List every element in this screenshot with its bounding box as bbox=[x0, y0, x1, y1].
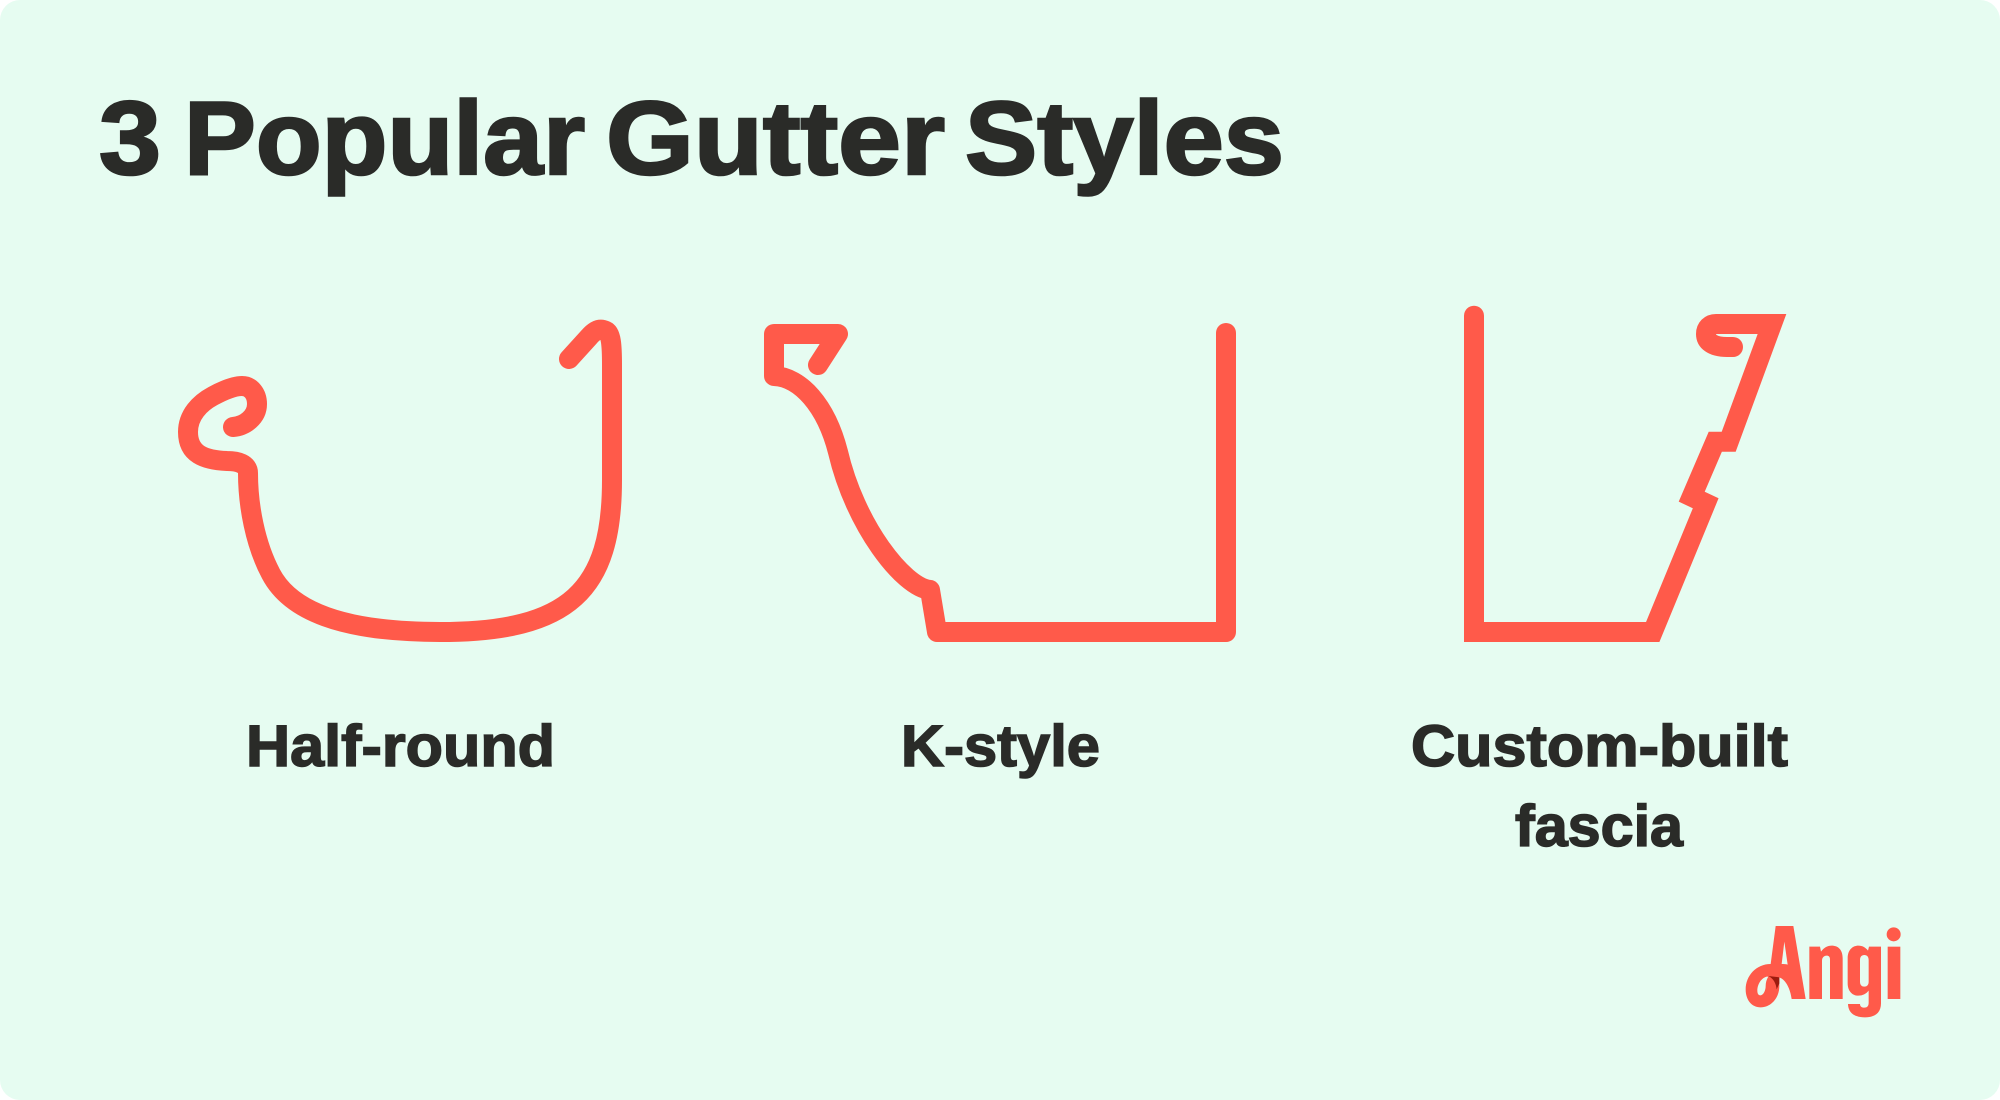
title: Popular bbox=[184, 81, 585, 197]
title: Styles bbox=[965, 81, 1284, 197]
label: Custom-built fascia bbox=[1411, 714, 1788, 859]
title: Gutter bbox=[606, 81, 945, 197]
gutter diagram: custom-built fascia bbox=[1474, 316, 1772, 632]
title bbox=[99, 81, 1284, 197]
gutter diagram: K-style bbox=[774, 333, 1226, 632]
label: Half-round: Half-round bbox=[246, 714, 555, 779]
logo: Angi bbox=[1746, 926, 1901, 1017]
label: Custom-built fascia: Custom-built bbox=[1411, 714, 1788, 779]
gutter diagram: half-round bbox=[188, 330, 612, 632]
title: 3 bbox=[99, 81, 161, 197]
label: K-style: K-style bbox=[901, 714, 1100, 779]
label: Custom-built fascia: fascia bbox=[1515, 794, 1684, 859]
